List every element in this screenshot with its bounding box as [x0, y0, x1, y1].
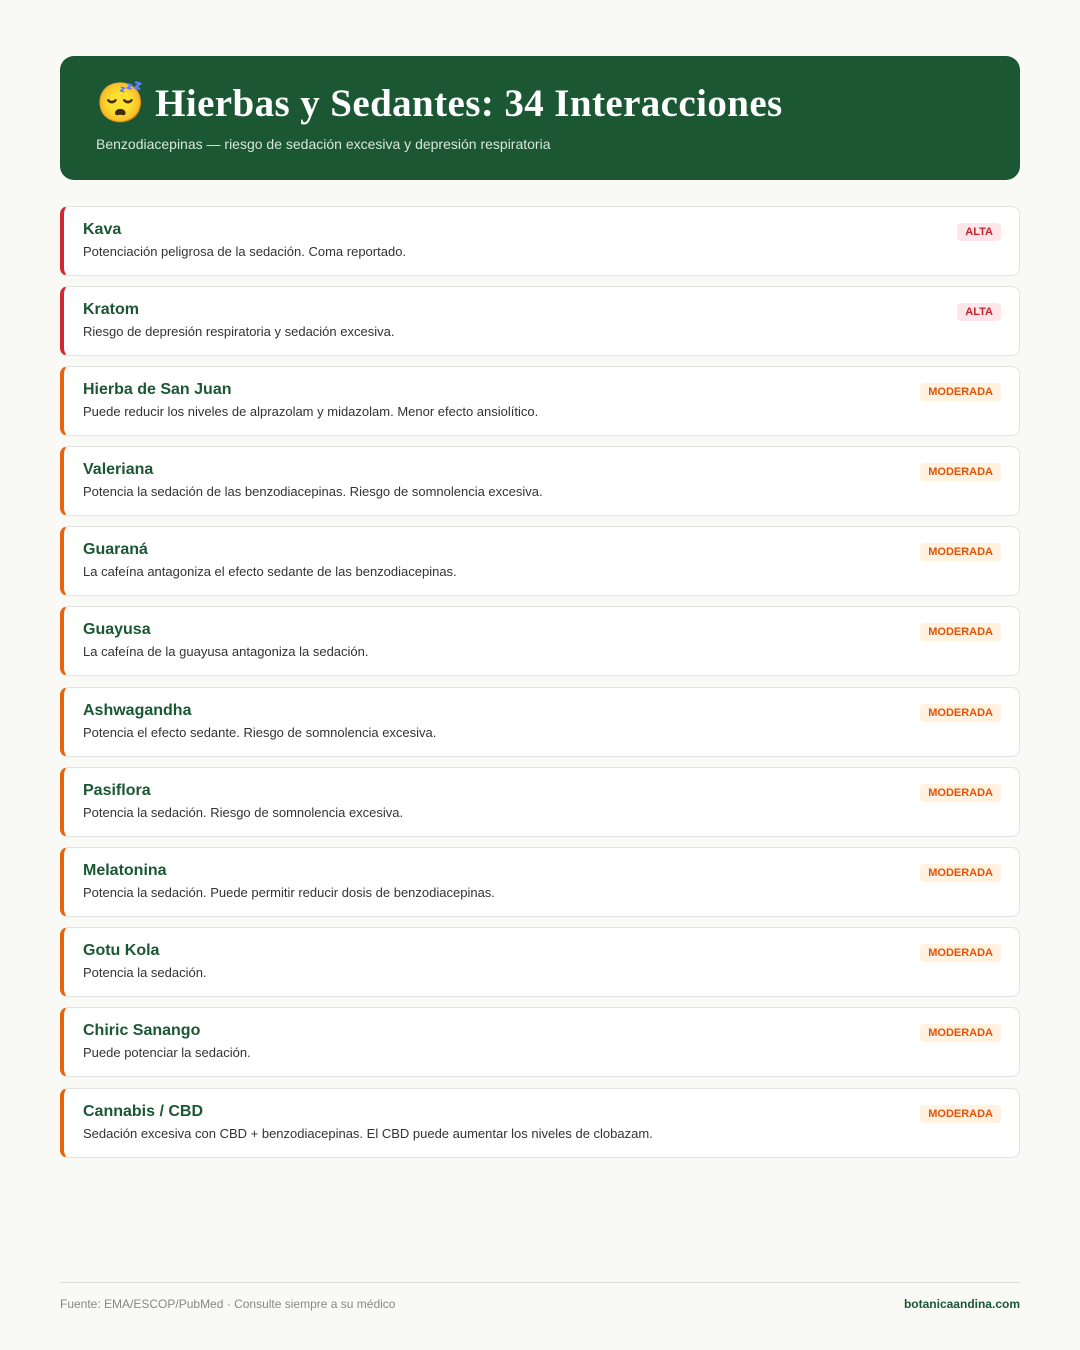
card: Kava: Potenciación peligrosa de la sedación. Coma reportado.	[83, 244, 406, 259]
card: Guaraná: MODERADA	[928, 546, 993, 558]
card: Kava: ALTA	[965, 226, 993, 238]
footer	[60, 1282, 1020, 1311]
card: Gotu Kola	[60, 927, 1020, 997]
card: Valeriana: MODERADA	[928, 466, 993, 478]
card: Kratom: Riesgo de depresión respiratoria y sedación excesiva.	[83, 324, 394, 339]
card: Guaraná: Guaraná	[83, 541, 148, 558]
card: Chiric Sanango	[60, 1007, 1020, 1077]
card: Gotu Kola: Gotu Kola	[83, 942, 159, 959]
card: Kratom: Kratom	[83, 301, 139, 318]
card: Chiric Sanango: Puede potenciar la sedación.	[83, 1045, 251, 1060]
card: Cannabis / CBD: Cannabis / CBD	[83, 1103, 203, 1120]
card: Kava	[60, 206, 1020, 276]
card: Gotu Kola: Potencia la sedación.	[83, 965, 207, 980]
card: Guaraná	[60, 526, 1020, 596]
card: Hierba de San Juan: MODERADA	[928, 386, 993, 398]
card: Valeriana: Potencia la sedación de las benzodiacepinas. Riesgo de somnolencia excesiva.	[83, 484, 543, 499]
card: Hierba de San Juan: Hierba de San Juan	[83, 381, 232, 398]
card: Guayusa: La cafeína de la guayusa antagoniza la sedación.	[83, 644, 368, 659]
card: Gotu Kola: MODERADA	[928, 947, 993, 959]
card: Valeriana	[60, 446, 1020, 516]
card: Ashwagandha: Potencia el efecto sedante. Riesgo de somnolencia excesiva.	[83, 725, 436, 740]
card: Ashwagandha: Ashwagandha	[83, 702, 191, 719]
card: Chiric Sanango: Chiric Sanango	[83, 1022, 200, 1039]
card: Guayusa: Guayusa	[83, 621, 151, 638]
card: Hierba de San Juan	[60, 366, 1020, 436]
card: Melatonina: MODERADA	[928, 867, 993, 879]
card: Valeriana: Valeriana	[83, 461, 153, 478]
card: Pasiflora: Potencia la sedación. Riesgo de somnolencia excesiva.	[83, 805, 403, 820]
card: Guayusa: MODERADA	[928, 626, 993, 638]
card: Kratom	[60, 286, 1020, 356]
card: Kratom: ALTA	[965, 306, 993, 318]
card: Ashwagandha	[60, 687, 1020, 757]
card: Melatonina: Potencia la sedación. Puede permitir reducir dosis de benzodiacepinas.	[83, 885, 495, 900]
card: Hierba de San Juan: Puede reducir los niveles de alprazolam y midazolam. Menor efecto ansiolítico.	[83, 404, 538, 419]
card: Guayusa	[60, 606, 1020, 676]
card: Guaraná: La cafeína antagoniza el efecto sedante de las benzodiacepinas.	[83, 564, 457, 579]
card: Pasiflora	[60, 767, 1020, 837]
footer: Fuente: EMA/ESCOP/PubMed · Consulte siempre a su médico	[60, 1297, 395, 1311]
card: Pasiflora: MODERADA	[928, 787, 993, 799]
card: Melatonina	[60, 847, 1020, 917]
card: Ashwagandha: MODERADA	[928, 707, 993, 719]
footer: botanicaandina.com	[904, 1297, 1020, 1311]
card: Chiric Sanango: MODERADA	[928, 1027, 993, 1039]
card: Pasiflora: Pasiflora	[83, 782, 151, 799]
card: Cannabis / CBD	[60, 1088, 1020, 1158]
card: Kava: Kava	[83, 221, 121, 238]
header	[60, 56, 1020, 180]
title: 😴 Hierbas y Sedantes: 34 Interacciones	[96, 82, 783, 125]
card: Melatonina: Melatonina	[83, 862, 167, 879]
card: Cannabis / CBD: Sedación excesiva con CBD + benzodiacepinas. El CBD puede aumentar los niveles de clobazam.	[83, 1126, 653, 1141]
card: Cannabis / CBD: MODERADA	[928, 1108, 993, 1120]
subtitle: Benzodiacepinas — riesgo de sedación excesiva y depresión respiratoria	[96, 136, 550, 152]
